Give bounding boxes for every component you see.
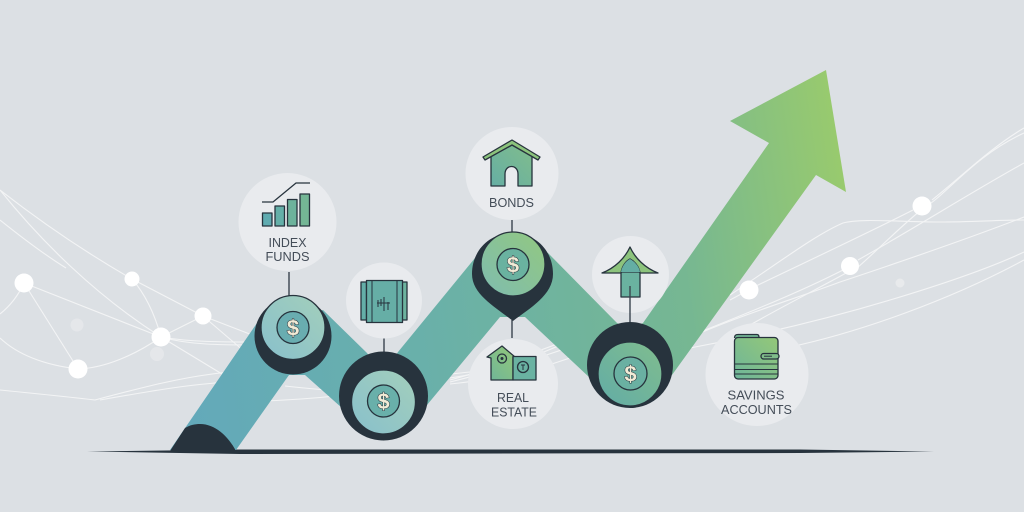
icon: up arrow [602,247,658,323]
growth arrow ribbon [170,70,846,450]
label: index funds: INDEX [268,235,307,250]
panel: index funds [238,173,336,271]
node 4 [587,322,673,408]
panel: real estate [468,339,558,429]
label: real estate: ESTATE [491,404,537,420]
label: savings accounts: SAVINGS [728,388,785,402]
left network lines and nodes [0,190,470,402]
panel: book icon badge [346,262,422,338]
connector lines [289,212,512,353]
node 1 [254,296,332,374]
start mound [170,424,236,451]
baseline [87,450,934,454]
right network lines and nodes [450,128,1024,384]
icon: bar chart [262,183,310,226]
panel: bonds [466,127,558,220]
label: real estate: REAL [497,390,529,405]
node 3 [472,232,553,321]
label: savings accounts: ACCOUNTS [721,402,792,417]
icon: house and safe [487,346,536,380]
label: index funds: FUNDS [266,249,310,264]
dollar sign: $ [624,362,637,386]
node 2 [339,352,428,440]
panel: savings accounts [706,323,808,426]
label: bonds: BONDS [489,195,534,210]
dollar sign: $ [287,316,299,340]
icon: ledger [361,280,407,322]
icon: wallet [734,334,779,379]
dollar sign: $ [377,389,390,414]
panel: arrow badge [592,236,669,323]
icon: house [483,140,540,186]
dollar sign: $ [507,252,519,278]
